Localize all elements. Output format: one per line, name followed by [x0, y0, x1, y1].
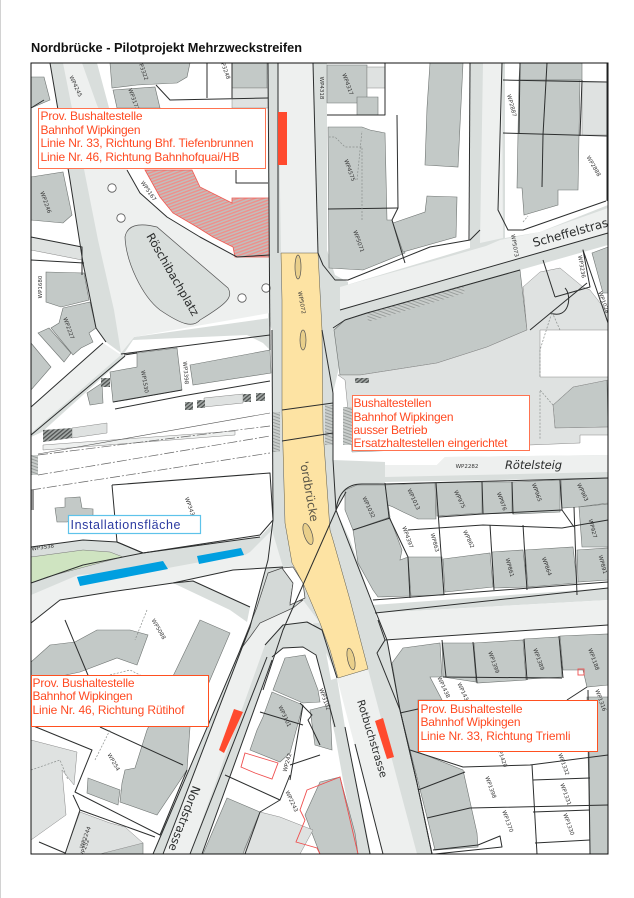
parcel labels: WP861: [504, 558, 514, 578]
parcel labels: WP343: [183, 497, 195, 517]
parcel labels: WP2888: [585, 155, 601, 178]
parcel labels: WP252: [79, 839, 91, 859]
road name: Rötelsteig: Rötelsteig: [505, 458, 562, 472]
parcel labels: WP2227: [61, 317, 75, 341]
parcel labels: WP2243: [283, 790, 299, 814]
parcel labels: WP3101: [276, 705, 291, 728]
parcel labels: WP1438: [435, 676, 451, 700]
installation area bar: right: [197, 548, 244, 564]
green area: [31, 550, 123, 583]
light structures: [31, 67, 608, 854]
callout: line 33 Triemli: [418, 700, 598, 752]
parcel labels: WP4317: [340, 73, 354, 97]
red outlines: affected plots: [241, 669, 584, 854]
parcel labels: WP5071: [351, 230, 365, 253]
callout: line 46 Rütihof: Linie Nr. 46, Richtung Rütihof: [32, 703, 185, 717]
parcel labels: WP976: [495, 492, 507, 512]
parcel labels: WP862: [461, 530, 475, 550]
callout: top left bus stop: Prov. Bushaltestelle: [40, 109, 143, 123]
installation area bar: left: [77, 561, 168, 586]
parcel labels: WP1420: [494, 745, 508, 769]
road name: Scheffelstrasse: Scheffelstrasse: [531, 212, 623, 250]
parcel labels: WP1437: [455, 682, 471, 706]
callout: line 46 Rütihof: [32, 676, 208, 726]
parcel labels: WP1530: [139, 370, 149, 394]
parcel labels: WP965: [530, 483, 542, 503]
callout: line 33 Triemli: Prov. Bushaltestelle: [420, 702, 523, 716]
plaza: Röschibachplatz: [125, 225, 230, 324]
callout: top left bus stop: Linie Nr. 33, Richtung Bhf. Tiefenbrunnen: [40, 136, 254, 150]
parcel labels: WP242: [283, 753, 293, 773]
bus stop marker: Rotbuchstrasse: [375, 718, 394, 759]
parcel labels: WP1399: [486, 651, 500, 675]
parcel labels: WP1188: [586, 648, 600, 672]
callout: top left bus stop: [38, 108, 266, 168]
parcel labels: WP1332: [556, 753, 570, 776]
parcel labels: WP1680: [38, 275, 44, 298]
parcel labels: WP1398: [483, 776, 497, 800]
parcel labels: WP4575: [342, 159, 356, 183]
parcel labels: WP1331: [558, 783, 572, 806]
bus stop marker: Nordstrasse: [219, 709, 243, 753]
parcel labels: WP963: [575, 483, 589, 503]
road name: Röschibachplatz: Röschibachplatz: [143, 230, 202, 318]
callout: stops out of service: ausser Betrieb: [354, 423, 428, 437]
lane ovals: [295, 255, 357, 670]
parcel labels: WP1389: [531, 648, 545, 672]
parcel labels: WP3322: [135, 58, 149, 81]
callout: line 46 Rütihof: Bahnhof Wipkingen: [32, 689, 132, 703]
parcel labels: WP4397: [400, 526, 414, 550]
hatched structures: [31, 285, 465, 510]
callout: installation area: [68, 516, 200, 534]
parcel labels: WP5167: [139, 180, 157, 203]
parcel labels: WP3398: [181, 361, 189, 385]
parcel labels: WP2244: [79, 825, 93, 849]
parcel labels: WP254: [105, 753, 121, 773]
parcel labels: WP3172: [126, 88, 140, 111]
parcel labels: WP3102: [317, 688, 331, 711]
parcel labels: WP927: [587, 519, 597, 539]
parcel labels: WP975: [452, 490, 466, 510]
parcel labels: WP5072: [296, 291, 306, 315]
callout: top left bus stop: Bahnhof Wipkingen: [40, 123, 140, 137]
callout: line 46 Rütihof: Prov. Bushaltestelle: [32, 676, 135, 690]
callout: stops out of service: [352, 396, 530, 450]
callout: stops out of service: Ersatzhaltestellen eingerichtet: [354, 436, 508, 450]
parcel labels: WP864: [540, 557, 552, 577]
bus stop marker: Nordbrücke top: [278, 112, 287, 165]
parcel labels: WP1316: [593, 689, 607, 713]
parcel labels: WP4245: [67, 75, 83, 99]
parcel labels: WP1330: [561, 813, 575, 837]
title: Nordbrücke - Pilotprojekt Mehrzweckstreifen: [31, 41, 302, 55]
red hatched construction area: [145, 170, 269, 257]
parcel labels: WP891: [597, 555, 607, 575]
parcel labels: WP3248: [217, 57, 231, 81]
parcel labels: WP3538: [31, 543, 55, 553]
parcel labels: WP2282: [456, 464, 478, 470]
road name: Nordstrasse: Nordstrasse: [166, 784, 203, 853]
road name: Nordbrücke: 'ordbrücke: [297, 460, 321, 523]
thin dashed outlines: [31, 131, 560, 780]
railway tracks: [31, 413, 270, 490]
parcel labels: WP1028: [596, 291, 610, 315]
parcel labels: WP5073: [509, 234, 519, 258]
road name: Rotbuchstrasse: Rotbuchstrasse: [354, 698, 389, 779]
parcel labels: WP1370: [500, 810, 514, 834]
callout: top left bus stop: Linie Nr. 46, Richtung Bahnhofquai/HB: [40, 150, 240, 164]
parcel labels: WP3236: [576, 255, 586, 279]
parcel labels: WP863: [429, 533, 439, 553]
callout: stops out of service: Bahnhof Wipkingen: [354, 410, 454, 424]
callout: line 33 Triemli: Linie Nr. 33, Richtung Triemli: [420, 729, 570, 743]
parcel labels: WP2246: [38, 191, 52, 215]
plaza trees: [108, 184, 270, 302]
parcel labels: WP1032: [360, 496, 375, 519]
callout: installation area: Installationsfläche: [70, 518, 181, 532]
callout: stops out of service: Bushaltestellen: [354, 396, 432, 410]
callout: line 33 Triemli: Bahnhof Wipkingen: [420, 715, 520, 729]
parcel labels: WP5088: [150, 618, 166, 641]
yellow multi-purpose lane: [281, 253, 368, 678]
parcel labels: WP1013: [405, 488, 421, 512]
road islands: [240, 567, 371, 854]
parcel labels: WP2887: [505, 94, 517, 118]
parcel labels: WP4318: [318, 77, 324, 100]
